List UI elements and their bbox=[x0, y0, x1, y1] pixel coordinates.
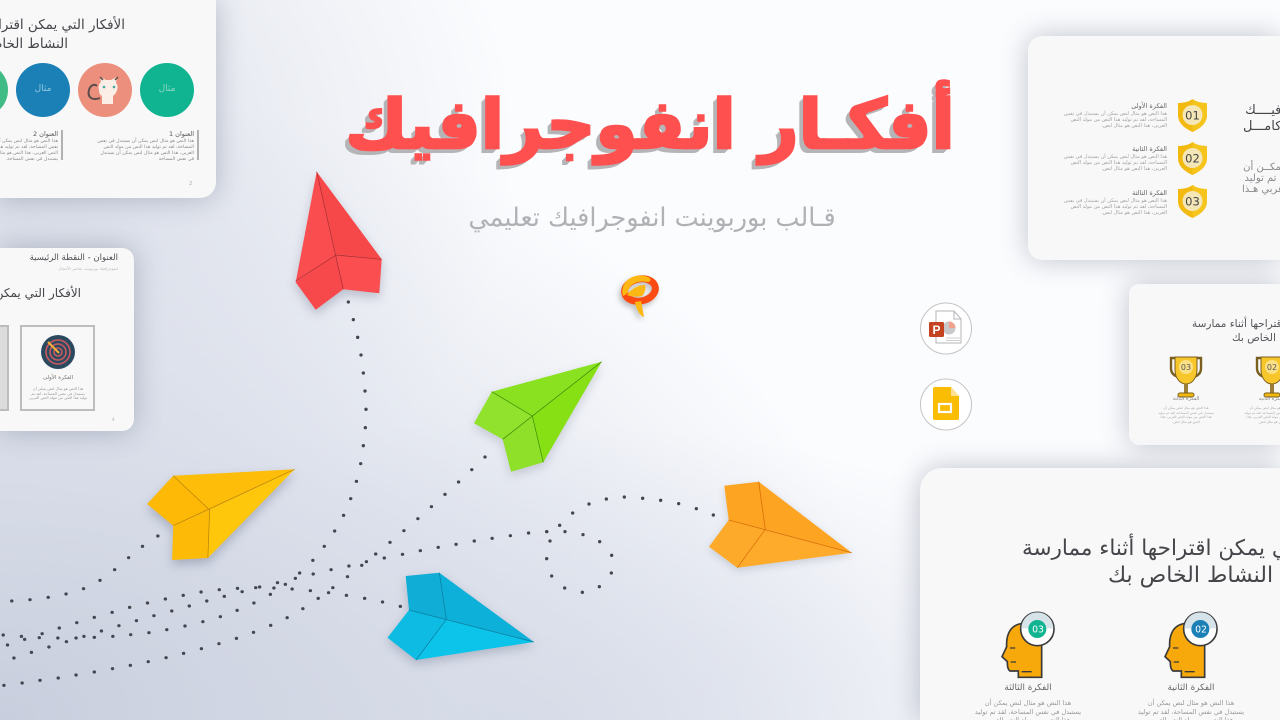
head 02 text: هذا النص هو مثال لنص يمكن أن bbox=[1148, 699, 1234, 707]
shield item 1: هذا النص هو مثال لنص يمكن أن يستبدل في نفس bbox=[1064, 111, 1167, 117]
trophy 03 text: هذا النص من مولد النص العربى، هذا bbox=[1161, 415, 1211, 419]
shield item 3 bbox=[1064, 185, 1207, 218]
slide title: العنوان - النقطة الرئيسية bbox=[30, 253, 118, 263]
text block 1: العربى، هذا النص هو مثال لنص يمكن أن يستبدل bbox=[100, 151, 194, 156]
shield item 2 bbox=[1064, 142, 1207, 175]
icon: Google Slides bbox=[920, 378, 972, 430]
trophy 03 text: هذا النص هو مثال لنص يمكن أن bbox=[1163, 406, 1208, 410]
shield item 2: 02 bbox=[1185, 152, 1200, 166]
panel: middle right slide bbox=[1129, 284, 1280, 445]
title: أفكـار انفوجرافيك bbox=[345, 86, 955, 165]
head 03 text bbox=[975, 698, 1081, 720]
head 02 label: الفكرة الثانية bbox=[1168, 683, 1214, 693]
shield item 1: 01 bbox=[1185, 108, 1200, 122]
trophy 02 text bbox=[1244, 406, 1280, 424]
shield item 2: العربى، هذا النص هو مثال لنص. bbox=[1101, 166, 1167, 172]
page number: 2 bbox=[189, 181, 192, 187]
icon: logo bbox=[616, 275, 660, 320]
icon: target bbox=[41, 335, 75, 369]
card text: يستبدل في نفس المساحة، لقد تم bbox=[31, 391, 85, 396]
panel: left slide bbox=[0, 248, 134, 431]
text block 1: في نفس المساحة bbox=[159, 157, 194, 162]
text block 1: العنوان 1 bbox=[169, 130, 194, 138]
head 02 text bbox=[1138, 698, 1244, 720]
head 03 text: يستبدل في نفس المساحة، لقد تم توليد bbox=[975, 708, 1081, 716]
shield item 3: المساحة، لقد تم توليد هذا النص من مولد النص bbox=[1070, 204, 1167, 210]
panel: top left slide: مثال bbox=[35, 84, 51, 94]
slide heading bbox=[0, 16, 125, 52]
head 03 label: الفكرة الثالثة bbox=[1004, 683, 1052, 693]
card heading: الفكرة الأولى bbox=[43, 375, 73, 381]
panel: middle right slide: الخاص بك bbox=[1232, 332, 1276, 344]
shield item 1: المساحة، لقد تم توليد هذا النص من مولد النص bbox=[1070, 117, 1167, 123]
card text bbox=[29, 386, 87, 400]
head 02 text: يستبدل في نفس المساحة، لقد تم توليد bbox=[1138, 708, 1244, 716]
text block 1 bbox=[97, 130, 199, 162]
panel: bottom right slide: النشاط الخاص بك bbox=[1108, 563, 1273, 588]
card text: توليد هذا النص من مولد النص العربى bbox=[29, 395, 87, 400]
example circles bbox=[0, 63, 194, 117]
shield item 2: المساحة، لقد تم توليد هذا النص من مولد النص bbox=[1070, 160, 1167, 166]
shield item 2: هذا النص هو مثال لنص يمكن أن يستبدل في نفس bbox=[1064, 154, 1167, 160]
icon: PowerPoint bbox=[920, 302, 972, 354]
card 1 bbox=[20, 325, 95, 411]
trophy 02: 02 bbox=[1267, 363, 1277, 372]
trophy 03 text bbox=[1158, 406, 1214, 424]
shield item 2: الفكرة الثانية bbox=[1132, 145, 1167, 153]
panel: bottom right slide bbox=[920, 468, 1280, 720]
head 03 text: هذا النص هو مثال لنص يمكن أن bbox=[985, 699, 1071, 707]
page number: 4 bbox=[112, 417, 115, 422]
slide subtitle: انفوجرافيك بوربوينت عناصر الأعمال bbox=[58, 266, 118, 271]
card 2 bbox=[0, 325, 9, 411]
text block 2 bbox=[0, 130, 63, 162]
shield item 3: 03 bbox=[1185, 194, 1200, 208]
subtitle: قـالب بوربوينت انفوجرافيك تعليمي bbox=[468, 203, 836, 233]
trophy 02 bbox=[1256, 356, 1280, 398]
trophy 03 bbox=[1170, 356, 1202, 398]
shield item 1: الفكرة الأولى bbox=[1131, 102, 1167, 110]
shield item 1: العربى، هذا النص هو مثال لنص. bbox=[1101, 123, 1167, 129]
clipped paragraph bbox=[1242, 160, 1280, 195]
text block 1: المساحة، لقد تم توليد هذا النص من مولد النص bbox=[103, 145, 194, 150]
text block 2: العنوان 2 bbox=[33, 130, 58, 138]
trophy 03 text: يستبدل في نفس المساحة، لقد تم توليد bbox=[1158, 410, 1214, 414]
icon: head 02 bbox=[1164, 612, 1218, 678]
shield item 3: العربى، هذا النص هو مثال لنص. bbox=[1101, 210, 1167, 216]
trophy 03 label: الفكرة الثالثة bbox=[1173, 396, 1199, 402]
shield item 3: الفكرة الثالثة bbox=[1132, 189, 1167, 197]
card text: هذا النص هو مثال لنص يمكن أن bbox=[33, 386, 83, 391]
panel: top right slide bbox=[1028, 36, 1280, 260]
icon: head 03 bbox=[1001, 612, 1055, 678]
circle labels: مثال bbox=[159, 84, 175, 94]
text block 1: هذا النص هو مثال لنص يمكن أن يستبدل في نفس bbox=[97, 139, 194, 144]
icon: head 02: 02 bbox=[1195, 625, 1207, 636]
trophy 03: 03 bbox=[1181, 363, 1191, 372]
clipped heading bbox=[1243, 103, 1280, 134]
icon: head 03: 03 bbox=[1032, 625, 1044, 636]
shield item 1 bbox=[1064, 99, 1207, 132]
panel: top left slide bbox=[0, 0, 216, 198]
shield item 3: هذا النص هو مثال لنص يمكن أن يستبدل في نفس bbox=[1064, 198, 1167, 204]
trophy 03 text: النص هو مثال لنص. bbox=[1172, 420, 1200, 424]
text block 2: يستبدل في نفس المساحة. bbox=[6, 157, 58, 162]
icon: PowerPoint: P bbox=[932, 323, 941, 337]
